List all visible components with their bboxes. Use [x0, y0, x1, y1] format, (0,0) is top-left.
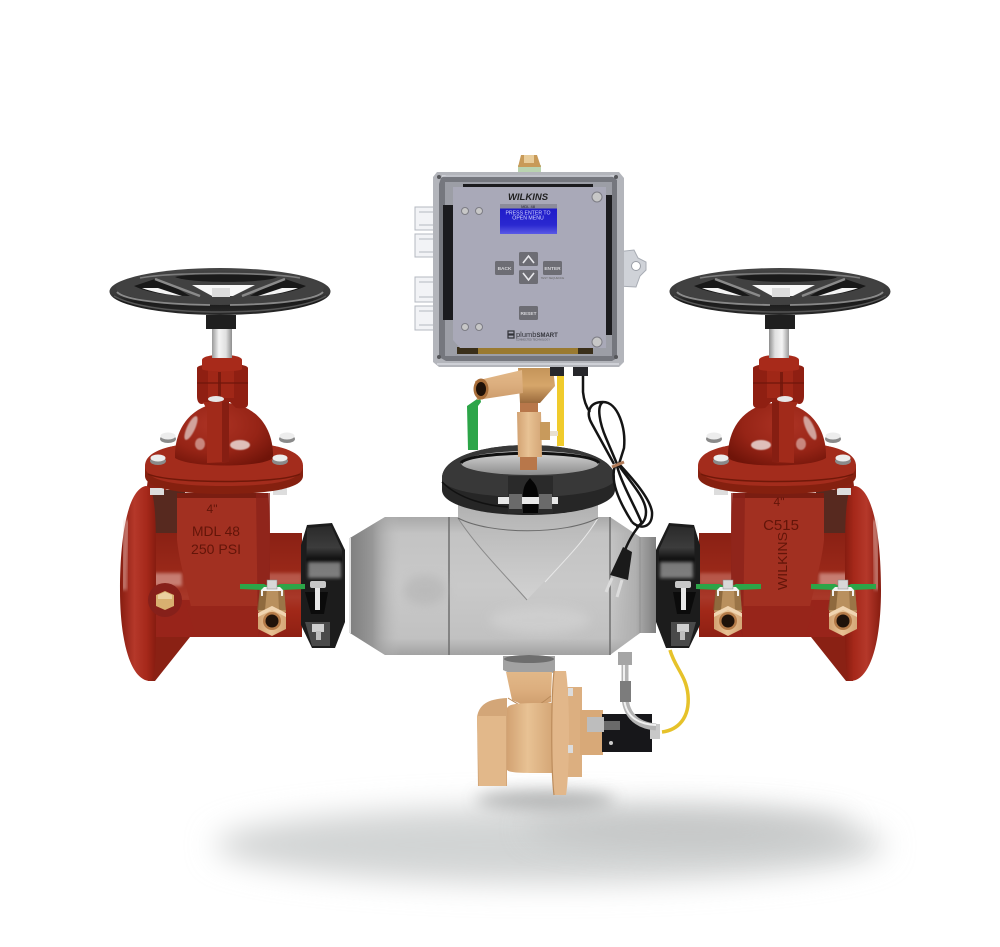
right test cock 1	[696, 580, 761, 636]
sensor	[602, 714, 652, 752]
mottling	[403, 575, 447, 605]
elbow	[477, 698, 507, 786]
valve body markings: 4"	[774, 495, 784, 509]
keypad	[495, 252, 564, 320]
cylinder	[507, 703, 553, 773]
collar	[503, 656, 555, 677]
dark inner strips	[443, 205, 454, 320]
display: OPEN MENU	[512, 216, 544, 222]
yellow wire lower	[662, 650, 688, 732]
valve body markings: C515	[763, 517, 799, 534]
neck	[506, 672, 552, 708]
brand: WILKINS	[508, 192, 549, 203]
valve body markings	[763, 495, 799, 590]
black power cable and plug	[583, 372, 652, 597]
valve body markings	[191, 502, 241, 557]
lower brass valve	[477, 650, 688, 795]
right handwheel	[670, 268, 890, 315]
faceplate	[453, 187, 606, 348]
keypad: ENTER	[544, 266, 561, 272]
plug	[610, 547, 632, 580]
display: MDL 48	[521, 204, 536, 209]
left test cock	[240, 580, 305, 636]
cable tie	[612, 462, 624, 467]
keypad: BACK	[498, 266, 512, 272]
plumbsmart logo: plumbSMART	[516, 330, 558, 339]
corner screws	[437, 175, 618, 359]
keypad: TEST SEQUENCE	[541, 276, 564, 280]
flange disc	[552, 671, 569, 795]
plumbsmart logo	[508, 330, 558, 342]
control box	[415, 155, 646, 376]
cable glands	[550, 367, 564, 376]
valve body markings: 4"	[207, 502, 217, 516]
left handwheel	[110, 268, 330, 315]
green lever handle	[467, 397, 481, 450]
left hinges	[415, 207, 434, 330]
tee	[458, 500, 598, 600]
valve body markings: 250 PSI	[191, 541, 241, 557]
plug on left disc	[148, 583, 182, 617]
second body	[566, 687, 582, 777]
plumbsmart logo: CONNECTED TECHNOLOGY	[516, 338, 550, 342]
yellow wire upper	[557, 376, 564, 446]
right test cock 2	[811, 580, 876, 636]
display: PRESS ENTER TO	[505, 210, 551, 216]
display	[500, 204, 557, 234]
valve body markings: WILKINS	[775, 532, 790, 590]
main stainless steel body	[350, 500, 656, 655]
bolts	[568, 688, 573, 696]
faceplate screws	[462, 192, 602, 347]
sensor tube elbow	[625, 660, 656, 727]
ground shadow	[215, 790, 885, 883]
clamp	[508, 476, 553, 513]
brass tee	[474, 368, 558, 470]
keypad: RESET	[520, 311, 537, 317]
right latch	[616, 250, 646, 287]
right gate valve	[656, 315, 881, 681]
enclosure	[433, 172, 624, 367]
top black flange	[442, 445, 615, 515]
left gate valve	[120, 315, 345, 681]
top conduit connector	[518, 155, 541, 173]
valve body markings: MDL 48	[192, 523, 240, 539]
